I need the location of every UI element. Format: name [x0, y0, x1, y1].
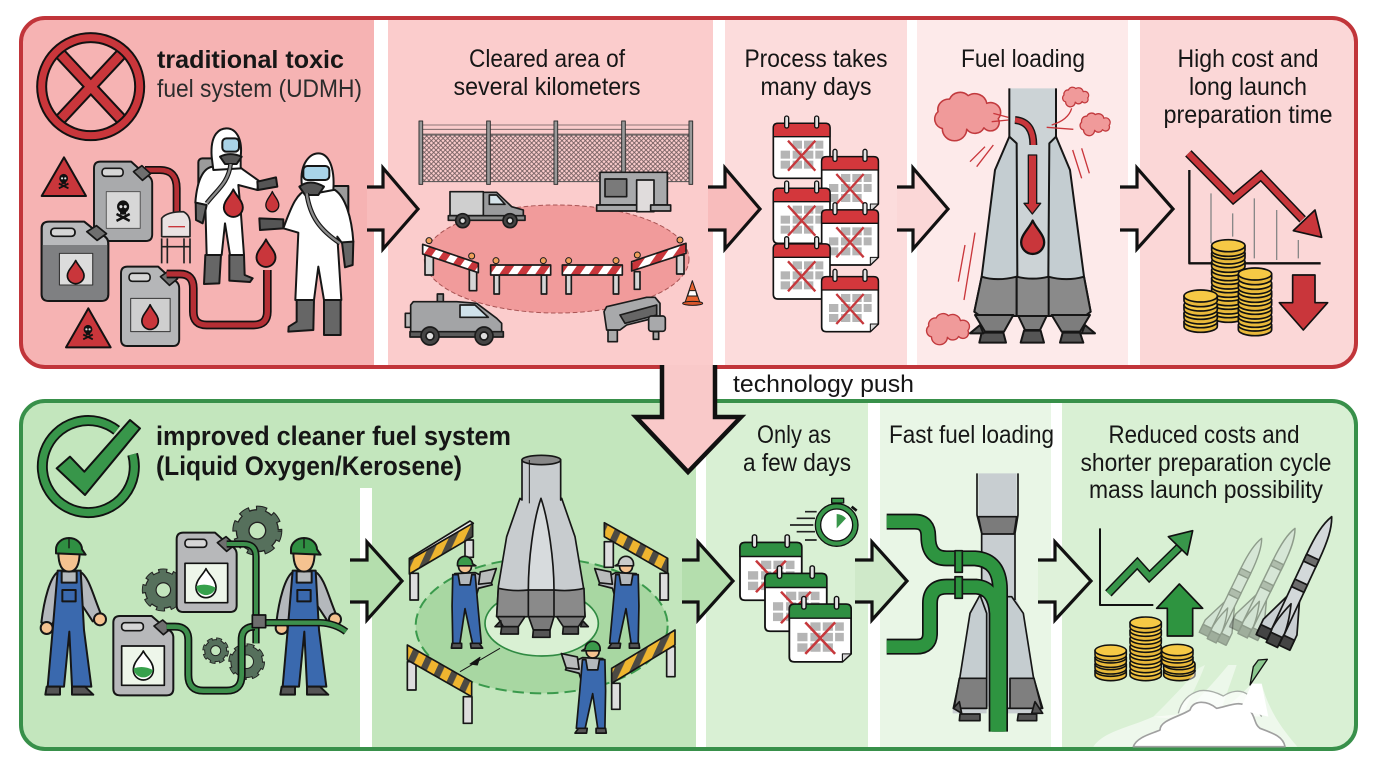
heading: reduced costs: shorter preparation cycle [1080, 449, 1332, 477]
icon: hazard triangle top [42, 157, 86, 196]
rocket core [1009, 88, 1056, 315]
heading: high cost and long preparation [1164, 45, 1332, 129]
chain-link fence [419, 121, 693, 184]
chart bars and axes [1189, 170, 1321, 263]
coin stacks [1095, 617, 1195, 681]
heading: reduced costs: Reduced costs and [1108, 421, 1300, 449]
icon: green calendars [740, 535, 851, 662]
exhaust trails [1093, 665, 1297, 747]
rocket [495, 455, 588, 637]
hose: red upper [145, 170, 177, 213]
axes [1100, 528, 1153, 605]
icon: red drops [224, 189, 279, 267]
illustration: toxic fuel cans and hazmat workers [42, 128, 353, 347]
arrow: step 2 to 3 [708, 168, 760, 249]
illustration: cleared area with fence and barriers [405, 121, 703, 345]
illustration: leaking rocket fuel loading [927, 87, 1110, 345]
heading: traditional toxic fuel system: fuel system (UDMH) [157, 75, 362, 103]
generator [604, 297, 665, 342]
arrow: technology push [636, 365, 741, 472]
figure: hazmat worker left [195, 128, 277, 284]
icon: hazard triangle bottom [66, 308, 111, 347]
figure: hazmat worker right [259, 153, 353, 335]
heading: cleared area [454, 45, 640, 101]
chart: rising trend with coins [1095, 528, 1203, 681]
truck [448, 192, 525, 228]
traffic cone [683, 281, 703, 305]
up arrow [1157, 584, 1203, 636]
heading: only as a few days: a few days [743, 449, 851, 477]
coin stacks [1184, 240, 1272, 336]
barrier upper left [409, 521, 473, 600]
label: technology push: technology push [733, 371, 914, 398]
arrow: green step 3 to 4 [855, 542, 907, 620]
heading: only as a few days: Only as [757, 421, 831, 449]
icon: fuel can upper [177, 533, 237, 612]
illustration: workers with clean fuel cans and gears [41, 510, 346, 695]
barrier lower right [612, 630, 675, 709]
green fuel pipes [887, 522, 1000, 732]
figure: worker left [41, 538, 106, 695]
arrow: green step 1 to 2 [350, 542, 402, 620]
barrier lower left [407, 645, 472, 723]
smoke cloud [1133, 684, 1285, 747]
van [405, 294, 503, 345]
rocket boosters [974, 137, 1091, 316]
heading: reduced costs: mass launch possibility [1089, 476, 1323, 504]
heading: traditional toxic fuel system: traditional toxic [157, 46, 344, 74]
gears [145, 510, 278, 677]
icon: fuel can lower [121, 267, 179, 346]
ghost rocket 2 [1229, 521, 1309, 643]
arrow: step 4 to 5 [1120, 168, 1173, 249]
falling arrow [1188, 153, 1322, 237]
main rocket [1255, 509, 1348, 653]
heading: fuel loading: Fuel loading [961, 45, 1085, 73]
panel: traditional toxic fuel system [20, 17, 1357, 368]
heading: high cost and long preparation: High cost and [1178, 45, 1318, 73]
panel: improved cleaner fuel system [20, 400, 1357, 750]
icon: red prohibition X [42, 38, 140, 136]
heading: process takes many days: Process takes [744, 45, 888, 73]
worker front [561, 641, 606, 733]
down arrow [1279, 275, 1328, 330]
work zone ellipses [416, 558, 668, 693]
icon: skull fuel can [94, 162, 152, 241]
leak motion lines [958, 108, 1089, 300]
rocket body [953, 473, 1043, 721]
fuel clouds [927, 87, 1110, 345]
rocket engines [970, 315, 1095, 343]
guard booth [597, 172, 671, 212]
icon: fuel can lower [113, 616, 173, 695]
rising arrow [1108, 531, 1193, 593]
hose in worker hands [252, 615, 346, 632]
heading: process takes many days: many days [760, 73, 872, 101]
arrow: step 1 to 2 [367, 168, 418, 249]
illustration: mass launch rockets and smoke [1093, 509, 1348, 747]
heading: reduced costs [1080, 421, 1332, 504]
chart: falling cost with coins [1184, 153, 1328, 336]
worker left [451, 556, 496, 648]
arrow: green step 4 to 5 [1038, 542, 1091, 620]
heading: cleared area: several kilometers [454, 73, 640, 101]
heading: high cost and long preparation: preparation time [1164, 101, 1332, 129]
illustration: small safe work zone with rocket [407, 455, 675, 733]
icon: stopwatch [790, 498, 857, 544]
arrow: green step 2 to 3 [682, 542, 733, 620]
icon: fuel can dark band [42, 222, 108, 301]
barriers [423, 237, 686, 294]
icon: fuel device on stand [162, 212, 190, 263]
worker right [595, 556, 640, 648]
icon: stacked red calendars [773, 116, 878, 332]
hose: red lower [167, 270, 267, 325]
heading: only as a few days [743, 421, 851, 477]
green panel border [21, 401, 1356, 749]
illustration: fast loading with green pipes [887, 473, 1043, 732]
fuel arrows and drop [1015, 120, 1044, 254]
rocket flame [1250, 659, 1267, 685]
figure: worker right [276, 538, 341, 695]
hoses [167, 544, 256, 691]
heading: improved cleaner fuel system [156, 421, 511, 481]
heading: cleared area: Cleared area of [469, 45, 625, 73]
ghost rocket 1 [1198, 532, 1275, 647]
barrier upper right [604, 523, 668, 600]
heading: improved cleaner fuel system: (Liquid Oxygen/Kerosene) [156, 451, 462, 481]
exclusion zone ellipse [424, 205, 689, 313]
heading: improved cleaner fuel system: improved cleaner fuel system [156, 421, 511, 451]
heading: traditional toxic fuel system [157, 46, 362, 103]
icon: green check mark [42, 420, 140, 513]
heading: fast fuel loading: Fast fuel loading [889, 421, 1054, 449]
heading: high cost and long preparation: long launch [1189, 73, 1307, 101]
red panel border [21, 18, 1356, 367]
arrow: step 3 to 4 [897, 168, 948, 249]
heading: process takes many days [744, 45, 888, 101]
